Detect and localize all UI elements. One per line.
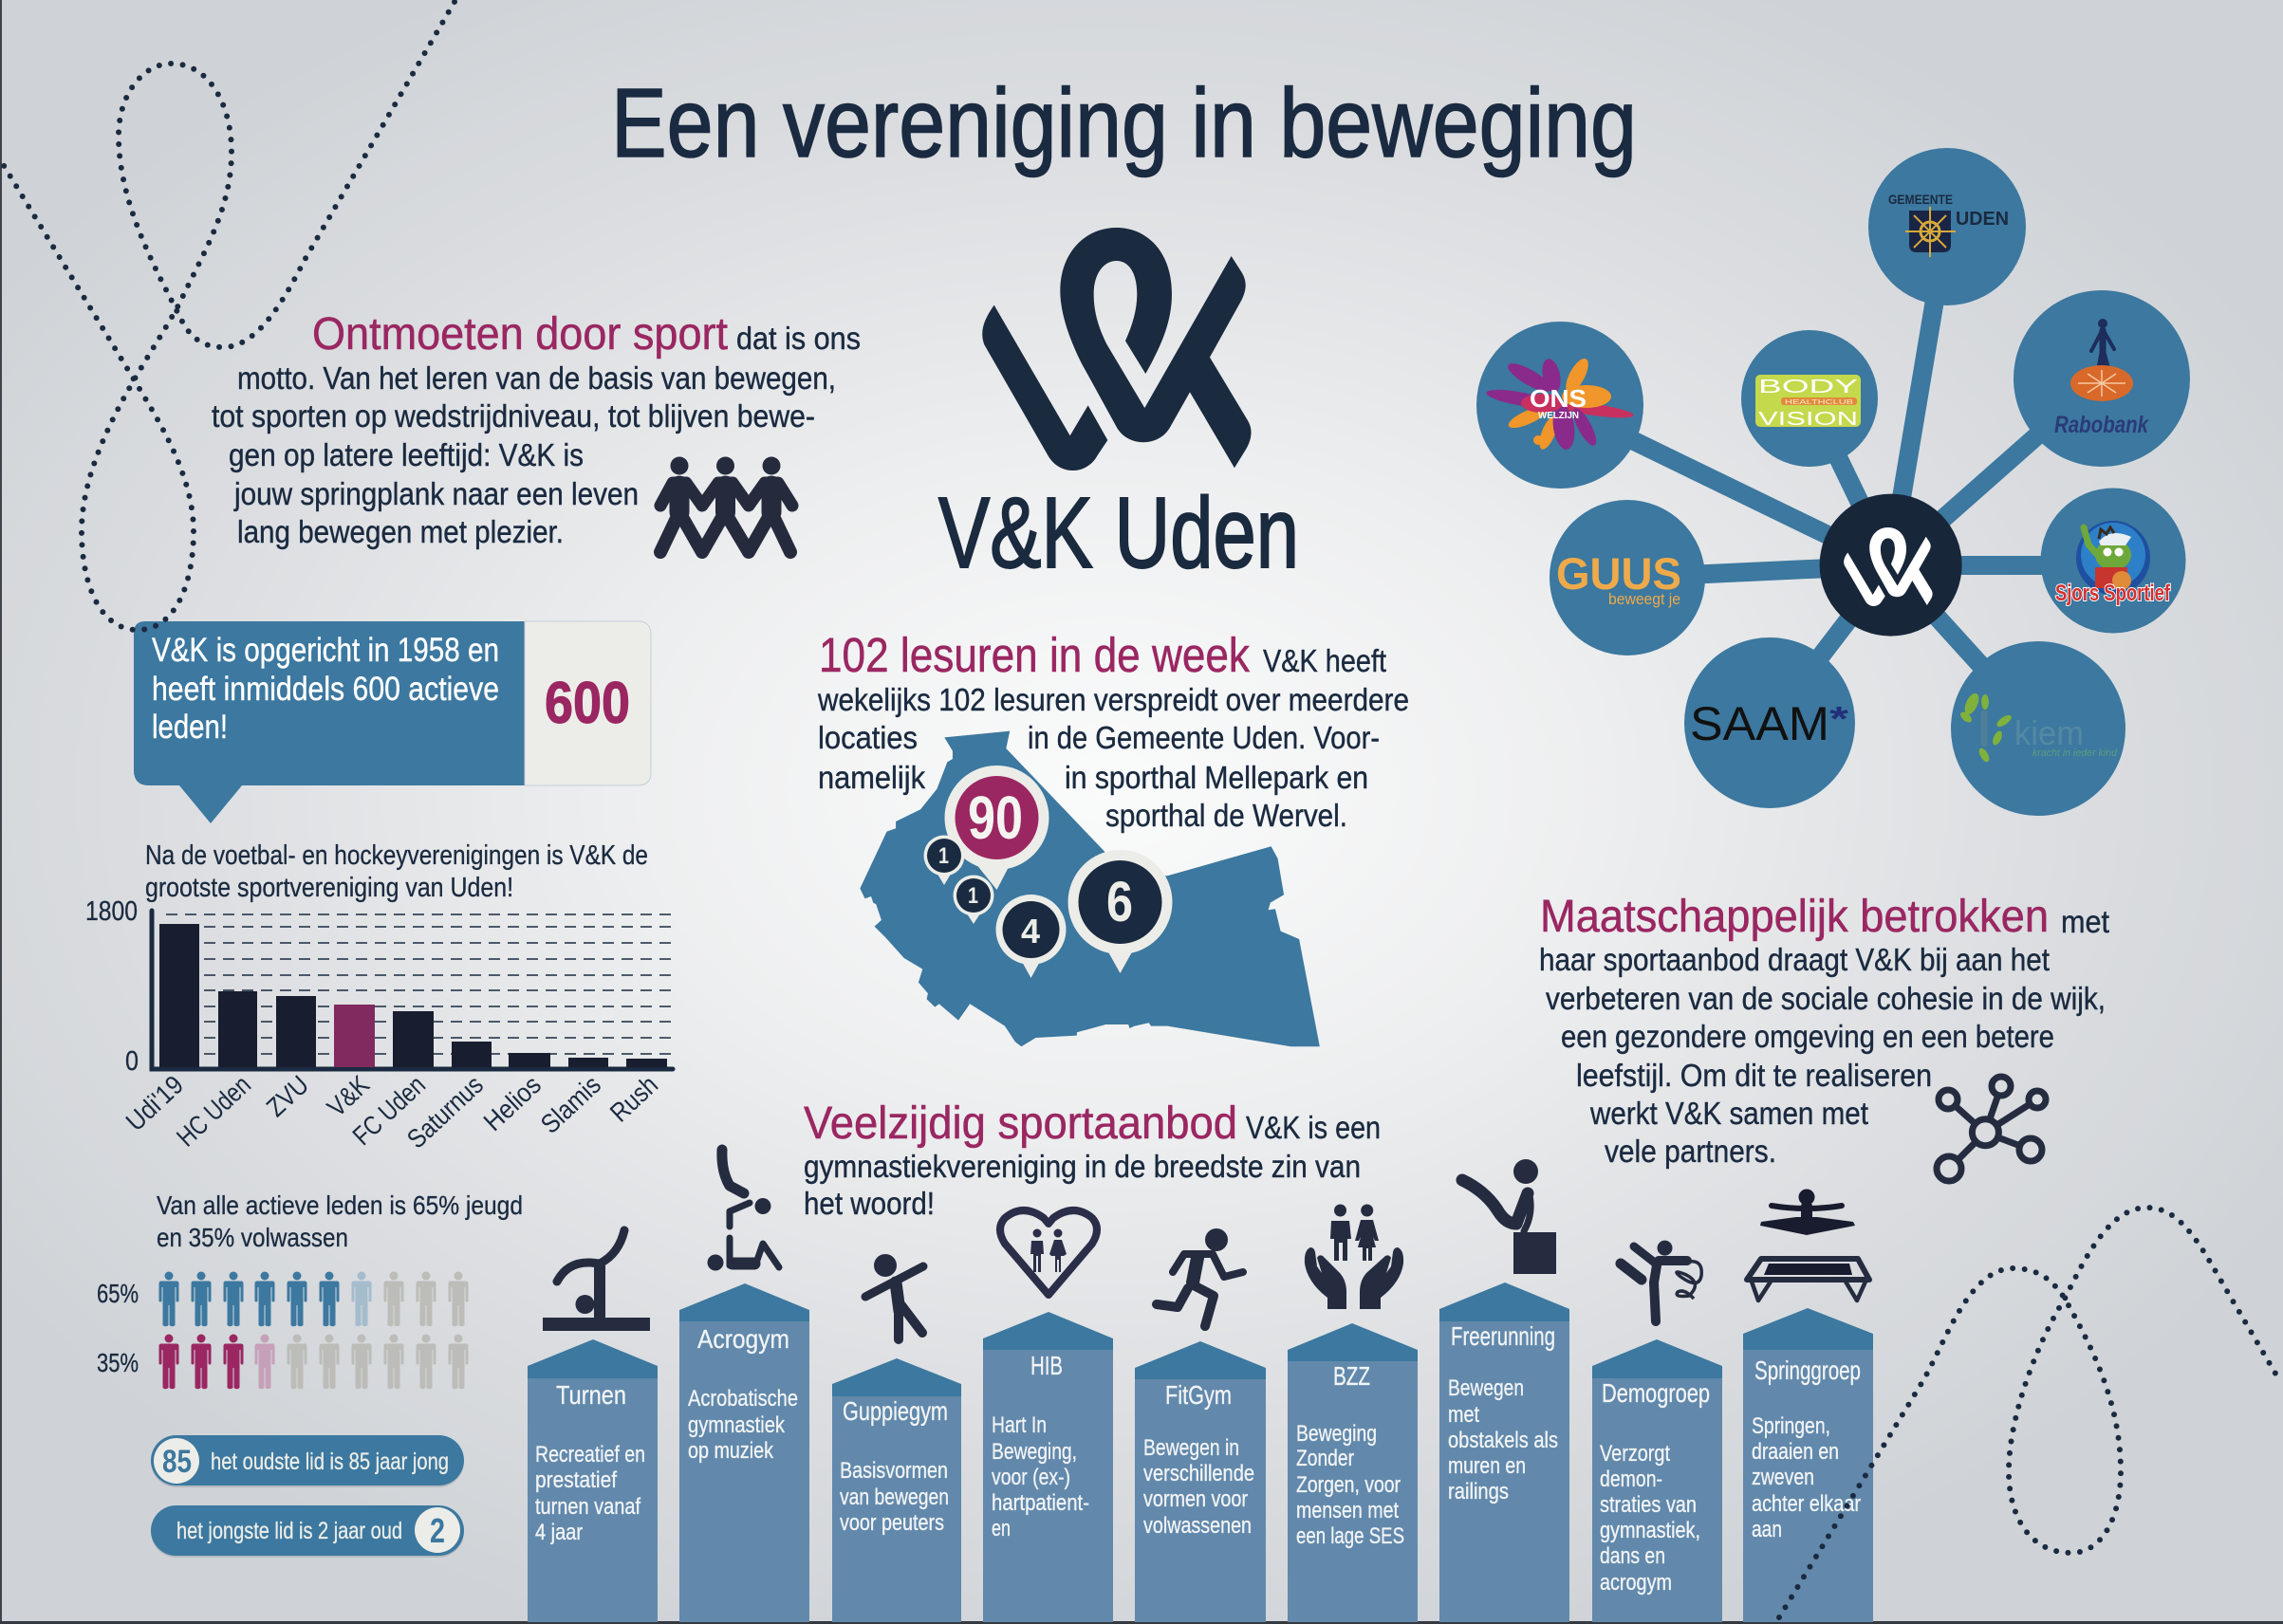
- bar labels: Rush: [604, 1070, 663, 1128]
- column: Guppiegym: van bewegen: [840, 1485, 949, 1510]
- icon: network: [1937, 1077, 2046, 1181]
- icon: trampoline jumper: [1747, 1190, 1869, 1301]
- text block: Veelzijdig sportaanbod: gymnastiekvereniging in de breedste zin van: [804, 1149, 1361, 1184]
- text block: Ontmoeten door sport: dat is ons: [736, 321, 861, 356]
- column: Acrogym: [679, 1283, 809, 1622]
- column: Demogroep: acrogym: [1600, 1570, 1672, 1596]
- pill: youngest member: het jongste lid is 2 jaar oud: [176, 1518, 402, 1544]
- heading: Veelzijdig sportaanbod: Veelzijdig sportaanbod: [804, 1098, 1237, 1149]
- column: Demogroep: gymnastiek,: [1600, 1518, 1700, 1543]
- text block: 102 lesuren in de week: V&K heeft: [1263, 643, 1386, 678]
- heading: 102 lesuren in de week: 102 lesuren in de week: [819, 628, 1250, 682]
- column: Freerunning: muren en: [1448, 1453, 1526, 1479]
- pin: 1: 1: [968, 883, 978, 909]
- node: Body Vision: BODY: [1758, 377, 1858, 397]
- column: FitGym: vormen voor: [1143, 1486, 1248, 1512]
- icon: rhythmic gymnast: [1621, 1241, 1701, 1321]
- column: Turnen: [528, 1339, 658, 1622]
- icon: freerunner on box: [1462, 1159, 1556, 1274]
- column: Guppiegym: Basisvormen: [840, 1458, 948, 1484]
- node: Rabobank: [2014, 290, 2190, 467]
- text block: 102 lesuren in de week: in de Gemeente Uden. Voor-: [1028, 720, 1380, 755]
- column: Springgroep: achter elkaar: [1752, 1491, 1861, 1517]
- node: Gemeente Uden: UDEN: [1956, 209, 2009, 230]
- node: Body Vision: HEALTHCLUB: [1785, 399, 1854, 406]
- text block: 102 lesuren in de week: in sporthal Mellepark en: [1065, 760, 1368, 795]
- text block: Maatschappelijk betrokken: leefstijl. Om dit te realiseren: [1576, 1058, 1932, 1093]
- column: BZZ: Zonder: [1296, 1446, 1354, 1471]
- node: Kiem: [1951, 641, 2125, 816]
- column: BZZ: Zorgen, voor: [1296, 1472, 1401, 1498]
- text block: Maatschappelijk betrokken: een gezondere omgeving en een betere: [1561, 1019, 2054, 1054]
- callout text: leden!: [152, 709, 228, 746]
- callout: 600 members: [134, 621, 651, 823]
- icon: runner: [1157, 1228, 1243, 1326]
- pictogram chart: 35% adults: 35%: [97, 1348, 139, 1377]
- node: ONS Welzijn: WELZIJN: [1538, 410, 1579, 421]
- node: Gemeente Uden: GEMEENTE: [1888, 192, 1953, 207]
- pin: 6: 6: [1106, 870, 1133, 933]
- map: gemeente Uden: [860, 731, 1320, 1046]
- bar labels: [121, 1070, 663, 1154]
- axis labels: 1800: [85, 896, 138, 927]
- pin: 1: 1: [938, 843, 949, 869]
- column: Turnen: turnen vanaf: [535, 1494, 640, 1520]
- node: ONS Welzijn: ONS: [1530, 384, 1587, 413]
- bar labels: Helios: [478, 1070, 547, 1136]
- node: Sjors Sportief: Sjors Sportief: [2055, 581, 2171, 606]
- column: HIB: HIB: [1030, 1351, 1063, 1380]
- text: youth and adults: Van alle actieve leden is 65% jeugd: [157, 1190, 523, 1220]
- axis labels: 0: [125, 1046, 139, 1077]
- text block: Maatschappelijk betrokken: [1539, 892, 2109, 1169]
- column: Guppiegym: voor peuters: [840, 1510, 944, 1536]
- bar labels: V&K: [322, 1070, 375, 1122]
- column: HIB: en: [992, 1516, 1011, 1541]
- column: Turnen: Recreatief en: [535, 1442, 645, 1467]
- column: BZZ: mensen met: [1296, 1498, 1399, 1523]
- text block: Ontmoeten door sport: jouw springplank naar een leven: [233, 476, 639, 511]
- node: SAAM: *: [1829, 699, 1848, 738]
- column: BZZ: [1288, 1323, 1418, 1622]
- axis labels: [85, 896, 139, 1077]
- column: Springgroep: Springgroep: [1754, 1356, 1861, 1385]
- text block: Maatschappelijk betrokken: met: [2061, 904, 2109, 939]
- column: Demogroep: [1592, 1339, 1722, 1622]
- column: Springgroep: zweven: [1752, 1465, 1814, 1490]
- column: BZZ: een lage SES: [1296, 1523, 1404, 1549]
- text: chart intro: Na de voetbal- en hockeyverenigingen is V&K de: [145, 840, 648, 871]
- column: Acrogym: Acrobatische: [688, 1386, 798, 1412]
- text block: 102 lesuren in de week: locaties: [818, 720, 918, 755]
- pictogram chart: 65% youth: 65%: [97, 1279, 139, 1308]
- column: Springgroep: draaien en: [1752, 1439, 1839, 1465]
- text block: Ontmoeten door sport: lang bewegen met plezier.: [237, 514, 564, 549]
- callout text: [152, 632, 499, 746]
- text: youth and adults: en 35% volwassen: [157, 1223, 348, 1252]
- column: Springgroep: [1743, 1308, 1873, 1622]
- node: Sjors Sportief: [2040, 488, 2186, 634]
- icon: acrogym: [708, 1150, 779, 1271]
- text block: Ontmoeten door sport: gen op latere leeftijd: V&K is: [229, 437, 584, 472]
- column: Guppiegym: Guppiegym: [843, 1396, 948, 1426]
- network diagram: partners: [1476, 148, 2190, 816]
- text block: 102 lesuren in de week: [817, 628, 1409, 833]
- node: Guus: beweegt je: [1608, 590, 1680, 608]
- bar labels: HC Uden: [171, 1070, 256, 1152]
- column: FitGym: verschillende: [1143, 1461, 1254, 1486]
- text block: Ontmoeten door sport: [212, 309, 861, 549]
- text block: Maatschappelijk betrokken: verbeteren van de sociale cohesie in de wijk,: [1546, 981, 2106, 1016]
- pill: oldest member: het oudste lid is 85 jaar jong: [211, 1449, 449, 1475]
- logo: V&K Uden: [938, 228, 1299, 589]
- bar labels: Saturnus: [401, 1070, 489, 1154]
- pill: youngest member: 2: [430, 1511, 445, 1550]
- text block: Maatschappelijk betrokken: haar sportaanbod draagt V&K bij aan het: [1539, 942, 2050, 977]
- node: Guus: [1550, 500, 1705, 655]
- node: Gemeente Uden: [1868, 148, 2026, 305]
- pin: 4: 4: [1021, 912, 1040, 950]
- bar labels: Udi'19: [121, 1070, 189, 1136]
- column: BZZ: Beweging: [1296, 1421, 1377, 1447]
- pill: oldest member: 85: [162, 1444, 192, 1480]
- node: Rabobank: Rabobank: [2054, 412, 2149, 438]
- connectors: [1560, 227, 2113, 729]
- column: Demogroep: dans en: [1600, 1543, 1665, 1569]
- node: Kiem: kracht in ieder kind: [2032, 747, 2118, 759]
- pictogram chart: 35% adults: [97, 1334, 469, 1389]
- column: Springgroep: aan: [1752, 1517, 1782, 1542]
- column: Freerunning: [1439, 1283, 1569, 1622]
- text block: 102 lesuren in de week: namelijk: [818, 760, 925, 795]
- pin: 90: 90: [968, 784, 1023, 852]
- column: Freerunning: met: [1448, 1402, 1479, 1428]
- text block: Maatschappelijk betrokken: werkt V&K samen met: [1589, 1096, 1868, 1131]
- icon: turnen: [543, 1230, 650, 1331]
- pill: youngest member: [151, 1505, 464, 1558]
- pin: 1: [924, 835, 964, 885]
- hub: V&K logo: [1820, 494, 1962, 637]
- column: HIB: voor (ex-): [992, 1465, 1070, 1490]
- column: Demogroep: straties van: [1600, 1492, 1697, 1518]
- column: FitGym: [1135, 1341, 1266, 1622]
- title: Een vereniging in beweging: [611, 68, 1637, 177]
- text block: Veelzijdig sportaanbod: V&K is een: [1246, 1110, 1381, 1145]
- pin: 4: [996, 895, 1067, 978]
- column: FitGym: Bewegen in: [1143, 1435, 1239, 1461]
- column: Acrogym: Acrogym: [697, 1324, 789, 1354]
- column: Turnen: prestatief: [535, 1467, 617, 1493]
- pill: oldest member: [151, 1435, 464, 1487]
- column: Demogroep: demon-: [1600, 1467, 1662, 1492]
- icon: heart with couple: [1000, 1210, 1097, 1295]
- logo: V&K Uden: V&K Uden: [938, 477, 1299, 589]
- text block: Veelzijdig sportaanbod: [804, 1098, 1381, 1221]
- callout text: V&K is opgericht in 1958 en: [152, 632, 499, 669]
- dotted line: left: [0, 2, 455, 630]
- column: FitGym: volwassenen: [1143, 1513, 1252, 1539]
- dotted line: right: [1779, 1208, 2281, 1617]
- column: Acrogym: op muziek: [688, 1438, 774, 1464]
- bar labels: ZVU: [261, 1070, 314, 1122]
- bar chart: club sizes: [85, 896, 673, 1154]
- heading: Ontmoeten door sport: Ontmoeten door sport: [312, 309, 728, 360]
- heading: Maatschappelijk betrokken: Maatschappelijk betrokken: [1540, 892, 2049, 942]
- pin: 1: [953, 875, 994, 924]
- bar labels: Slamis: [535, 1070, 606, 1139]
- pictogram chart: 65% youth: [97, 1271, 469, 1326]
- bars: [159, 924, 667, 1067]
- text block: Ontmoeten door sport: tot sporten op wedstrijdniveau, tot blijven bewe-: [212, 398, 815, 434]
- column: Guppiegym: [832, 1358, 961, 1622]
- text block: 102 lesuren in de week: wekelijks 102 lesuren verspreidt over meerdere: [817, 682, 1409, 717]
- text block: Ontmoeten door sport: motto. Van het leren van de basis van bewegen,: [237, 360, 836, 396]
- node: Guus: GUUS: [1556, 548, 1681, 599]
- icon: three people holding hands: [660, 457, 792, 552]
- column: Demogroep: Verzorgt: [1600, 1441, 1670, 1467]
- column: Turnen: Turnen: [556, 1380, 626, 1410]
- node: SAAM: SAAM: [1690, 697, 1829, 750]
- pin: 6: [1068, 850, 1173, 973]
- column: Springgroep: Springen,: [1752, 1413, 1830, 1439]
- column: HIB: hartpatient-: [992, 1490, 1089, 1516]
- column: BZZ: BZZ: [1333, 1361, 1370, 1391]
- node: Body Vision: VISION: [1758, 409, 1858, 430]
- column: Freerunning: Bewegen: [1448, 1375, 1524, 1401]
- column: HIB: Hart In: [992, 1412, 1047, 1438]
- text: youth and adults: [157, 1190, 523, 1252]
- node: ONS Welzijn: [1476, 322, 1643, 489]
- callout text: heeft inmiddels 600 actieve: [152, 671, 499, 708]
- text block: Veelzijdig sportaanbod: het woord!: [804, 1186, 935, 1221]
- icon: guppiegym: [865, 1254, 923, 1339]
- column: Acrogym: gymnastiek: [688, 1412, 786, 1438]
- node: Body Vision: [1741, 330, 1878, 467]
- node: SAAM: [1684, 637, 1855, 808]
- column: Freerunning: railings: [1448, 1479, 1509, 1504]
- column: FitGym: FitGym: [1165, 1380, 1232, 1410]
- text block: 102 lesuren in de week: sporthal de Wervel.: [1105, 798, 1347, 833]
- column: Turnen: 4 jaar: [535, 1520, 583, 1545]
- column: HIB: Beweging,: [992, 1439, 1077, 1465]
- column: HIB: [983, 1312, 1113, 1622]
- text: chart intro: [145, 840, 648, 903]
- node: Kiem: kiem: [2014, 713, 2084, 752]
- bar labels: FC Uden: [347, 1070, 431, 1151]
- column: Freerunning: Freerunning: [1451, 1321, 1555, 1351]
- icon: hands holding couple: [1305, 1205, 1403, 1309]
- text block: Maatschappelijk betrokken: vele partners.: [1605, 1134, 1776, 1169]
- column: Demogroep: Demogroep: [1602, 1378, 1710, 1408]
- pin: 90: [945, 766, 1049, 890]
- number: 600: 600: [545, 671, 630, 736]
- text: chart intro: grootste sportvereniging van Uden!: [145, 873, 513, 903]
- column: Freerunning: obstakels als: [1448, 1428, 1558, 1453]
